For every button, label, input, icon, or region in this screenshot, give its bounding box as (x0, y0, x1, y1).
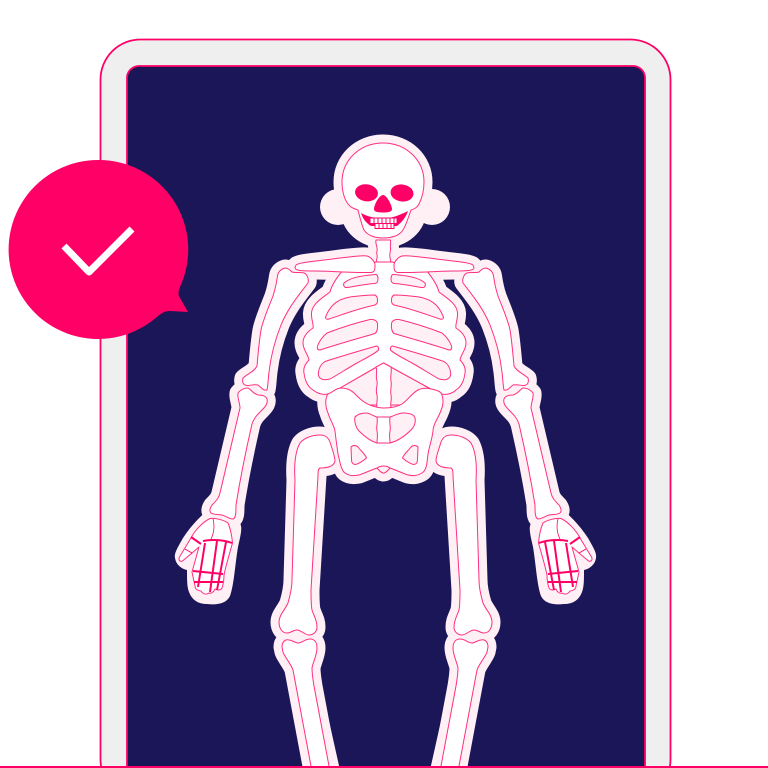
hip openings (351, 446, 366, 464)
sacrum opening (355, 413, 415, 443)
spine (376, 363, 391, 408)
pubic notch (377, 466, 390, 473)
left hand (179, 518, 232, 594)
neck (376, 240, 391, 263)
speech bubble check badge (9, 160, 188, 339)
skull (342, 143, 424, 238)
teeth (370, 218, 397, 228)
left ribs (317, 274, 379, 380)
right clavicle (394, 256, 474, 273)
right arm (463, 268, 561, 519)
right leg (436, 435, 492, 768)
right hand (538, 518, 592, 594)
nose (374, 195, 392, 212)
left arm (210, 268, 308, 519)
right ribs (390, 274, 452, 380)
screen panel (127, 66, 645, 768)
sacrum (377, 417, 390, 443)
pelvis (326, 388, 443, 476)
bottom baseline (0, 766, 768, 768)
left leg (279, 435, 335, 768)
icon: check mark (64, 229, 132, 272)
eye sockets (354, 183, 415, 203)
left clavicle (295, 256, 375, 273)
skeleton bones (179, 143, 592, 768)
device frame (100, 40, 670, 768)
mouth (361, 211, 408, 226)
skeleton halo (175, 143, 596, 768)
ribcage (303, 262, 466, 408)
